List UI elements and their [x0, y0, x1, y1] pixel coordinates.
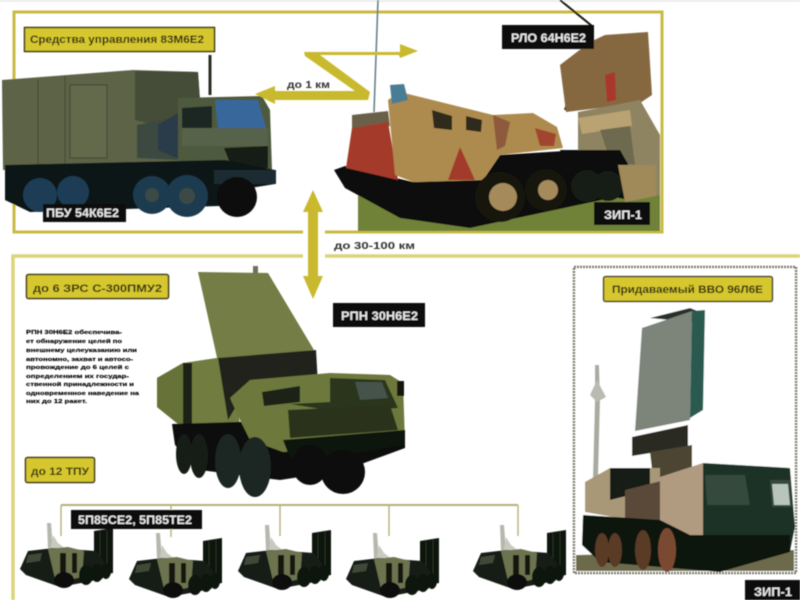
text block: radar description: внешнему целеуказанию или [26, 348, 138, 354]
label: ЗИП-1 top [594, 202, 650, 225]
label: до 1 км: до 1 км [287, 80, 330, 91]
label: РЛО 64Н6Е2: РЛО 64Н6Е2 [511, 33, 586, 45]
label: control means: Средства управления 83М6Е2 [30, 34, 204, 46]
label: ЗИП-1 bottom: ЗИП-1 [754, 587, 793, 599]
label: РПН 30Н6Е2 [333, 303, 425, 327]
label: РПН 30Н6Е2: РПН 30Н6Е2 [341, 311, 418, 323]
photo: grass ground [358, 188, 660, 231]
label: launcher models: 5П85СЕ2, 5П85ТЕ2 [78, 515, 192, 527]
label: up to 12 launchers: до 12 ТПУ [31, 466, 89, 478]
vehicle: launcher 4 [346, 533, 439, 598]
vehicle: radar truck РЛО 64Н6Е2 [334, 0, 660, 228]
vehicle: command truck ПБУ 54К6Е2 [2, 55, 276, 217]
label: ЗИП-1 top: ЗИП-1 [604, 210, 643, 222]
vehicle: launcher 3 [238, 525, 331, 590]
label: launcher models [71, 510, 202, 529]
label: attached low-altitude detector [604, 276, 772, 302]
label: up to 6 SAM systems [26, 274, 168, 298]
text block: radar description: ет обнаружение целей по [26, 338, 123, 345]
label: ПБУ 54К6Е2 [43, 204, 126, 222]
text block: radar description: одновременное наведение на [26, 391, 140, 397]
icon: antenna mast [374, 0, 378, 112]
text block: radar description: РПН 30Н6Е2 обеспечива- [26, 329, 122, 336]
panel: lower frame [13, 256, 800, 600]
text block: radar description: ственной принадлежности и [26, 381, 135, 388]
vehicle: launcher 5 [473, 525, 566, 590]
text block: radar description: определением их государ- [26, 374, 129, 380]
text block: radar description [26, 329, 140, 405]
vehicle: radar truck РПН 30Н6Е2 [157, 266, 405, 497]
label: up to 6 SAM systems: до 6 ЗРС С-300ПМУ2 [33, 283, 162, 295]
label: ЗИП-1 bottom [745, 580, 800, 600]
vehicle: launcher 2 [129, 533, 222, 598]
label: РЛО 64Н6Е2 [502, 25, 594, 49]
chart: launcher connection lines [61, 505, 518, 537]
label: до 30-100 км: до 30-100 км [334, 241, 415, 252]
arrow: до 30-100 км vertical [303, 190, 323, 299]
arrow: до 1 км zigzag [255, 44, 418, 104]
photo: radar vehicle 96Л6Е [576, 308, 795, 572]
text block: radar description: них до 12 ракет. [26, 399, 88, 405]
text block: radar description: автономно, захват и автосо- [26, 357, 133, 363]
label: ПБУ 54К6Е2: ПБУ 54К6Е2 [46, 208, 119, 220]
label: up to 12 launchers [26, 458, 94, 482]
label: attached low-altitude detector: Придаваемый ВВО 96Л6Е [612, 284, 763, 296]
text block: radar description: провождение до 6 целей с [26, 364, 130, 371]
panel: attached radar frame [574, 267, 796, 573]
panel: top frame [14, 12, 662, 232]
label: control means [24, 28, 214, 52]
vehicle: launcher 1 [20, 523, 113, 588]
